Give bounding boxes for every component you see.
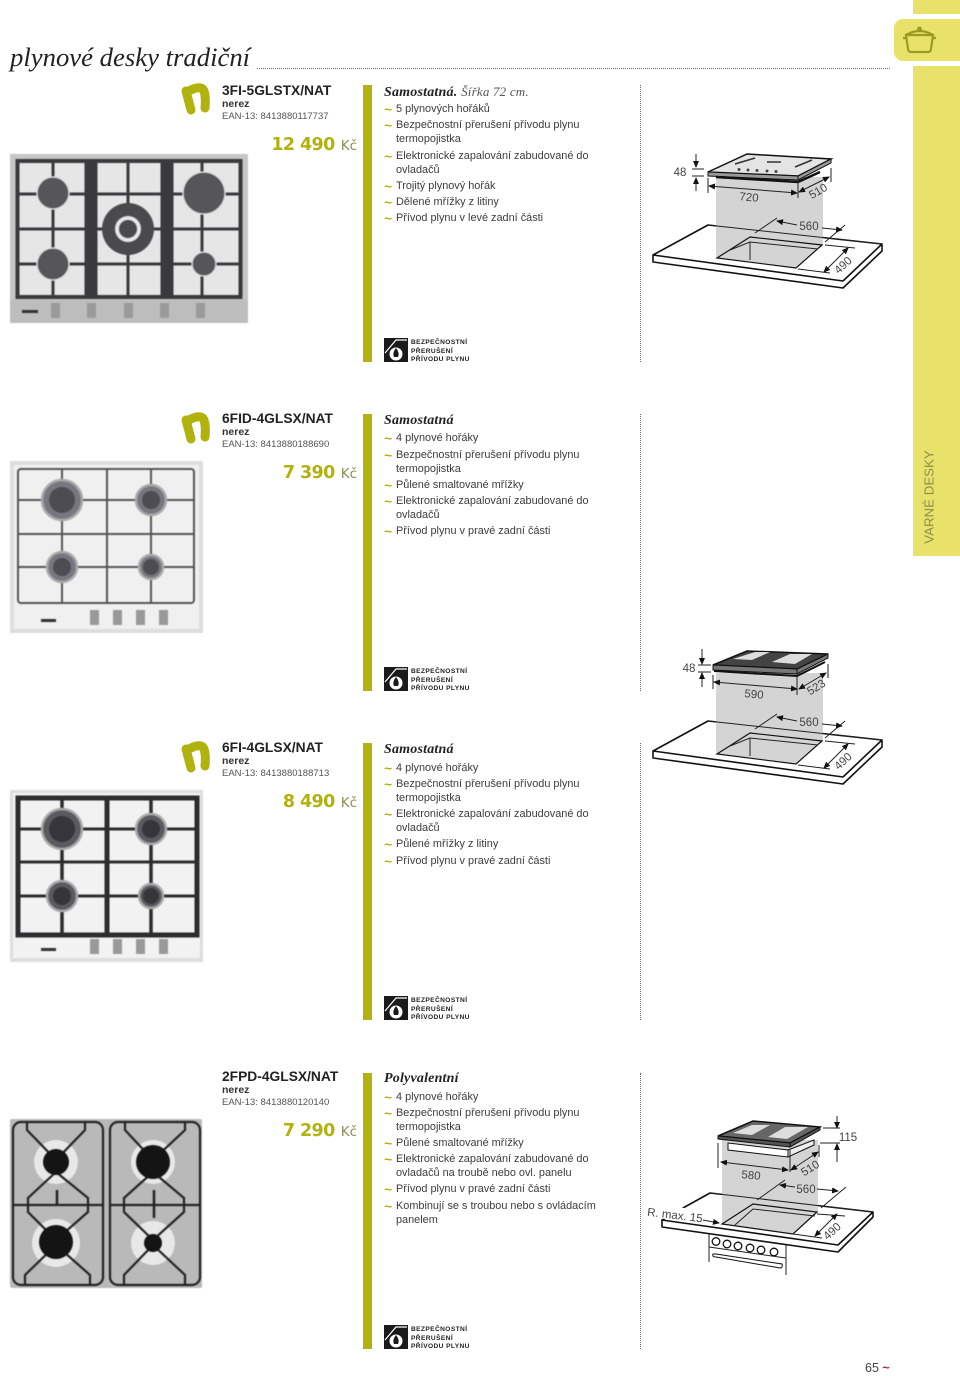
safety icon and label: PŘÍVODU PLYNU xyxy=(411,685,470,692)
product identification: 2FPD-4GLSX/NAT xyxy=(222,1069,338,1084)
feature list: Bezpečnostní přerušení přívodu plynu xyxy=(396,119,579,131)
photo: hob with five burners xyxy=(10,154,248,324)
product identification: 6FID-4GLSX/NAT xyxy=(222,411,333,426)
product identification: 6FI-4GLSX/NAT xyxy=(222,740,323,755)
safety icon and label: BEZPEČNOSTNÍ xyxy=(411,997,467,1004)
safety icon and label: BEZPEČNOSTNÍ xyxy=(411,339,467,346)
product identification: 12 490 Kč xyxy=(271,135,357,155)
dotted divider xyxy=(640,743,641,1020)
feature list: Bezpečnostní přerušení přívodu plynu xyxy=(396,449,579,461)
feature list: Půlené smaltované mřížky xyxy=(396,479,524,491)
dotted divider xyxy=(640,85,641,362)
feature list: Přívod plynu v levé zadní části xyxy=(396,212,543,224)
dimension diagram: 490 xyxy=(822,1221,844,1243)
panel: 3FI-5GLSTX/NAT xyxy=(10,83,883,363)
dimension diagram: 510 xyxy=(807,182,830,202)
accent bar xyxy=(363,85,372,362)
panel: 2FPD-4GLSX/NAT xyxy=(10,1069,874,1350)
feature list: Dělené mřížky z litiny xyxy=(396,196,499,208)
dimension diagram: 560 xyxy=(796,1184,816,1196)
photo: white hob with four burners xyxy=(10,460,204,634)
dimension diagram: 720 xyxy=(739,191,759,205)
feature list: panelem xyxy=(396,1214,438,1226)
product identification: nerez xyxy=(222,98,249,110)
safety icon and label xyxy=(384,1325,470,1350)
accent bar xyxy=(363,1073,372,1349)
safety icon and label: PŘÍVODU PLYNU xyxy=(411,1343,470,1350)
feature list: termopojistka xyxy=(396,463,461,475)
accent bar xyxy=(363,743,372,1020)
dotted divider xyxy=(640,414,641,691)
safety icon and label: PŘERUŠENÍ xyxy=(411,1335,453,1342)
badge icon xyxy=(182,741,210,772)
feature list: ovladačů na troubě nebo ovl. panelu xyxy=(396,1167,572,1179)
title: plynové desky tradiční xyxy=(10,42,250,72)
feature list: termopojistka xyxy=(396,133,461,145)
feature list: Samostatná xyxy=(384,413,454,428)
feature list: Bezpečnostní přerušení přívodu plynu xyxy=(396,778,579,790)
product identification: nerez xyxy=(222,755,249,767)
dimension diagram xyxy=(652,649,883,785)
product identification xyxy=(222,740,357,812)
section tab: yellow side strip xyxy=(894,0,960,556)
safety icon and label: PŘERUŠENÍ xyxy=(411,677,453,684)
feature list: 4 plynové hořáky xyxy=(396,1091,478,1103)
dimension diagram xyxy=(647,1116,874,1275)
feature list: Samostatná. Šířka 72 cm. xyxy=(384,84,529,100)
dimension diagram: 560 xyxy=(799,717,819,729)
feature list xyxy=(384,413,589,537)
feature list: Bezpečnostní přerušení přívodu plynu xyxy=(396,1107,579,1119)
badge icon xyxy=(182,83,210,114)
feature list: ovladačů xyxy=(396,164,440,176)
photo: grey hob with cast grates xyxy=(10,1118,202,1288)
feature list xyxy=(384,84,589,224)
safety icon and label: PŘERUŠENÍ xyxy=(411,1006,453,1013)
dimension diagram: 510 xyxy=(799,1159,822,1179)
dotted divider xyxy=(640,1073,641,1349)
feature list: Samostatná xyxy=(384,742,454,757)
dimension diagram: 560 xyxy=(799,221,819,233)
product identification: EAN-13: 8413880188713 xyxy=(222,768,329,779)
dimension diagram: 48 xyxy=(683,663,695,675)
feature list: Přívod plynu v pravé zadní části xyxy=(396,855,550,867)
safety icon and label: PŘÍVODU PLYNU xyxy=(411,356,470,363)
product identification xyxy=(222,411,357,483)
feature list: Půlené smaltované mřížky xyxy=(396,1137,524,1149)
badge icon xyxy=(182,412,210,444)
product identification: EAN-13: 8413880117737 xyxy=(222,111,329,122)
feature list: Kombinují se s troubou nebo s ovládacím xyxy=(396,1200,596,1212)
feature list: termopojistka xyxy=(396,792,461,804)
feature list: 5 plynových hořáků xyxy=(396,103,490,115)
feature list: Elektronické zapalování zabudované do xyxy=(396,150,589,162)
feature list: ovladačů xyxy=(396,822,440,834)
safety icon and label: BEZPEČNOSTNÍ xyxy=(411,668,467,675)
panel: 6FID-4GLSX/NAT xyxy=(10,411,883,1266)
product identification: 8 490 Kč xyxy=(283,792,357,812)
feature list: 4 plynové hořáky xyxy=(396,432,478,444)
feature list: Polyvalentní xyxy=(384,1071,459,1086)
dimension diagram: 48 xyxy=(674,167,686,179)
product identification: nerez xyxy=(222,426,249,438)
safety icon and label: PŘÍVODU PLYNU xyxy=(411,1014,470,1021)
feature list: Půlené mřížky z litiny xyxy=(396,838,498,850)
safety icon and label xyxy=(384,667,470,692)
product identification: EAN-13: 8413880120140 xyxy=(222,1097,329,1108)
dimension diagram: 490 xyxy=(833,255,855,277)
feature list: termopojistka xyxy=(396,1121,461,1133)
accent bar xyxy=(363,414,372,691)
dimension diagram: 523 xyxy=(805,678,828,698)
feature list: Přívod plynu v pravé zadní části xyxy=(396,1183,550,1195)
icon: cooking pot xyxy=(903,26,936,54)
feature list: ovladačů xyxy=(396,509,440,521)
safety icon and label: PŘERUŠENÍ xyxy=(411,348,453,355)
feature list: Elektronické zapalování zabudované do xyxy=(396,495,589,507)
dimension diagram: 580 xyxy=(741,1169,761,1183)
feature list: Elektronické zapalování zabudované do xyxy=(396,808,589,820)
feature list: Trojitý plynový hořák xyxy=(396,180,495,192)
product identification xyxy=(222,83,357,155)
feature list xyxy=(384,1071,596,1226)
feature list: Elektronické zapalování zabudované do xyxy=(396,1153,589,1165)
dimension diagram: 490 xyxy=(833,751,855,773)
dimension diagram: 590 xyxy=(744,688,764,702)
safety icon and label xyxy=(384,338,470,363)
feature list xyxy=(384,742,589,867)
product identification: 7 290 Kč xyxy=(283,1121,357,1141)
page number: 65 ~ xyxy=(865,1361,890,1375)
product identification: EAN-13: 8413880188690 xyxy=(222,439,329,450)
panel: 6FI-4GLSX/NAT xyxy=(10,740,641,1021)
product identification: 3FI-5GLSTX/NAT xyxy=(222,83,331,98)
product identification: nerez xyxy=(222,1084,249,1096)
safety icon and label xyxy=(384,996,470,1021)
photo: hob with dark grates xyxy=(10,790,204,962)
side label: VARNÉ DESKY xyxy=(921,450,936,543)
dimension diagram: 115 xyxy=(839,1132,857,1144)
dimension diagram: R. max. 15 xyxy=(647,1207,703,1225)
product identification xyxy=(222,1069,357,1141)
dimension diagram xyxy=(652,153,883,289)
product identification: 7 390 Kč xyxy=(283,463,357,483)
feature list: 4 plynové hořáky xyxy=(396,762,478,774)
safety icon and label: BEZPEČNOSTNÍ xyxy=(411,1326,467,1333)
feature list: Přívod plynu v pravé zadní části xyxy=(396,525,550,537)
